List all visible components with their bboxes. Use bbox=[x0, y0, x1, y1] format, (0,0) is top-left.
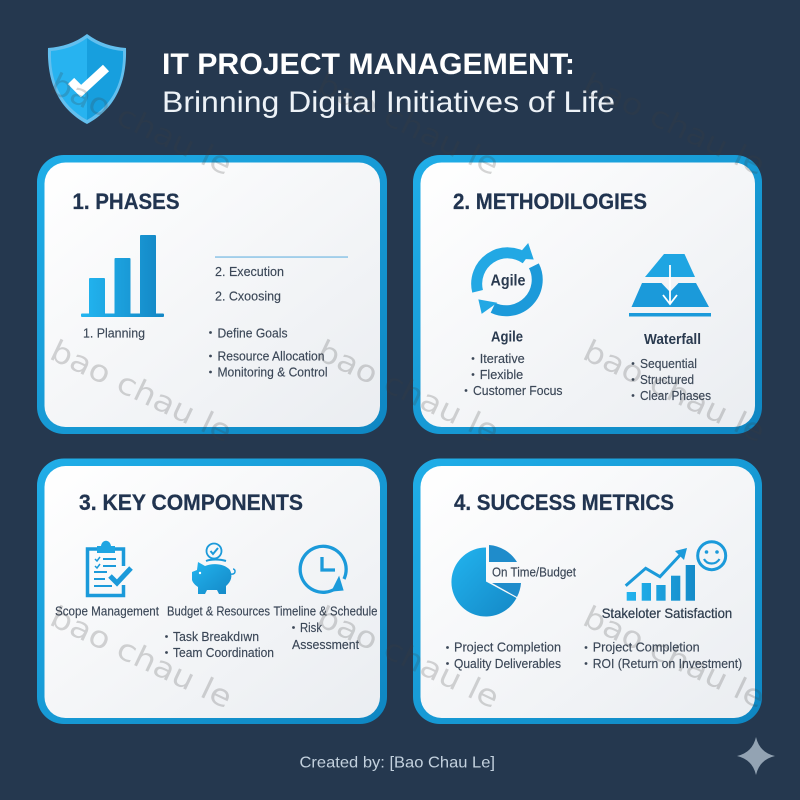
watermarks bbox=[45, 67, 770, 716]
phase bullets: Define Goals bbox=[218, 326, 288, 340]
watermarks: bao chau le bbox=[578, 600, 770, 716]
agile column: Agile bbox=[491, 329, 523, 346]
icon: agile cycle bbox=[477, 244, 537, 313]
title: Brinning Digital Initiatives of Life bbox=[162, 86, 615, 119]
component bullets: risk bbox=[292, 620, 359, 652]
panel: phases bbox=[37, 155, 387, 434]
label: stakeholder satisfaction: Stakeloter Satisfaction bbox=[602, 605, 732, 621]
phase list: 2. Execution bbox=[215, 264, 284, 279]
watermarks: bao chau le bbox=[45, 334, 237, 450]
icon: piggy bank bbox=[192, 544, 235, 594]
watermarks: bao chau le bbox=[45, 600, 237, 716]
icon: shield with check bbox=[48, 34, 126, 124]
component bullets: tasks: Task Breakdıwn bbox=[173, 629, 259, 644]
waterfall column bbox=[632, 331, 711, 403]
component bullets: risk: Assessment bbox=[292, 637, 359, 652]
component bullets: tasks bbox=[165, 629, 274, 660]
metrics bullets: left: Project Completion bbox=[454, 640, 561, 655]
icon: agile cycle: Agile bbox=[490, 273, 526, 290]
metrics bullets: left bbox=[446, 640, 561, 671]
chart: pie bbox=[451, 545, 576, 616]
phase bullets: Monitoring & Control bbox=[218, 365, 328, 380]
agile column bbox=[465, 329, 563, 398]
phase bullets bbox=[209, 326, 328, 380]
heading: phases: 1. PHASES bbox=[72, 189, 180, 214]
waterfall column: Structured bbox=[640, 372, 694, 387]
title bbox=[162, 48, 615, 119]
footer credit: Created by: [Bao Chau Le] bbox=[300, 755, 495, 772]
waterfall column: Sequential bbox=[640, 356, 697, 371]
heading: key components: 3. KEY COMPONENTS bbox=[79, 490, 303, 515]
component bullets: tasks: Team Coordination bbox=[173, 645, 274, 660]
metrics bullets: right: Project Completion bbox=[593, 640, 700, 655]
component labels: Scope Management bbox=[55, 604, 159, 619]
heading: methodologies: 2. METHODILOGIES bbox=[453, 189, 647, 214]
component bullets: risk: Risk bbox=[300, 620, 322, 635]
icon: waterfall bbox=[629, 254, 711, 316]
panel: key components bbox=[37, 458, 387, 724]
phase list: 2. Cxoosing bbox=[215, 289, 281, 304]
watermarks: bao chau le bbox=[578, 334, 770, 450]
component labels: Timeline & Schedule bbox=[274, 604, 378, 619]
watermarks: bao chau le bbox=[45, 67, 237, 183]
watermarks: bao chau le bbox=[312, 600, 504, 716]
phase bullets: Resource Allocation bbox=[218, 349, 324, 364]
component labels bbox=[55, 604, 378, 619]
heading: success metrics: 4. SUCCESS METRICS bbox=[454, 490, 674, 515]
title: IT PROJECT MANAGEMENT: bbox=[162, 48, 575, 81]
agile column: Iterative bbox=[480, 351, 525, 366]
metrics bullets: right: ROI (Return on Investment) bbox=[593, 656, 742, 671]
label: planning: 1. Planning bbox=[83, 326, 145, 340]
icon: clock bbox=[300, 546, 346, 592]
icon: bar chart bbox=[81, 235, 164, 317]
watermarks: bao chau le bbox=[578, 67, 770, 183]
phase list bbox=[215, 256, 348, 304]
agile column: Flexible bbox=[480, 367, 523, 382]
waterfall column: Clear Phases bbox=[640, 388, 711, 403]
metrics bullets: right bbox=[585, 640, 742, 671]
metrics bullets: left: Quality Deliverables bbox=[454, 656, 561, 671]
watermarks: bao chau le bbox=[312, 67, 504, 183]
icon: growth chart with smiley bbox=[626, 542, 726, 601]
agile column: Customer Focus bbox=[473, 383, 563, 398]
panel: methodologies bbox=[413, 155, 762, 434]
chart: pie: On Time/Budget bbox=[492, 565, 576, 580]
panel: success metrics bbox=[413, 458, 762, 724]
watermarks: bao chau le bbox=[312, 334, 504, 450]
component labels: Budget & Resources bbox=[167, 604, 270, 619]
icon: clipboard bbox=[88, 541, 131, 596]
waterfall column: Waterfall bbox=[644, 331, 701, 348]
icon: sparkle bbox=[737, 737, 775, 775]
